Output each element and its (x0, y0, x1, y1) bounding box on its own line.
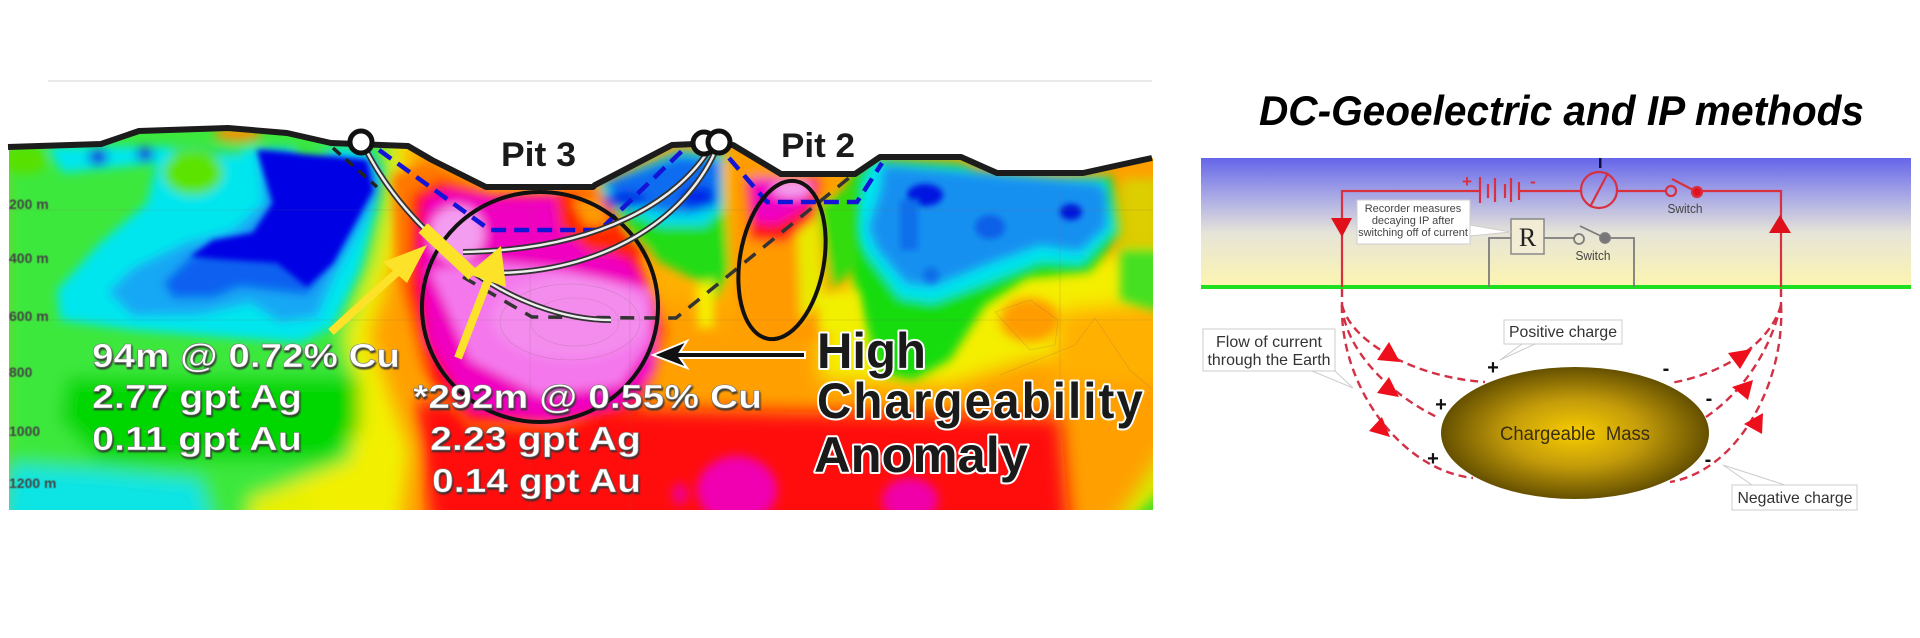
switch labels (1576, 201, 1702, 263)
chargeable mass: Chargeable Mass (1500, 424, 1650, 445)
contour and grid lines (9, 190, 1153, 510)
blue dashed pit outline right (729, 158, 882, 202)
charge symbols: + (1487, 357, 1499, 379)
battery polarity: - (1530, 172, 1536, 191)
title: DC-Geoelectric and IP methods (1259, 87, 1864, 134)
charge symbols: + (1427, 448, 1439, 470)
anomaly heading: Chargeability (817, 374, 1143, 429)
current symbol I (1599, 158, 1602, 168)
anomaly ellipse: Pit 2 (727, 174, 837, 346)
charge symbols: - (1663, 358, 1669, 380)
black dashed resource base (463, 173, 855, 318)
battery polarity (1462, 172, 1536, 191)
label: positive charge (1500, 320, 1622, 360)
depth axis labels: 1200 m (9, 475, 56, 491)
recorder callout: switching off of current (1358, 227, 1468, 239)
chargeability colour field (9, 131, 1153, 510)
switch labels: Switch (1576, 248, 1610, 263)
charge symbols: - (1705, 449, 1711, 471)
top divider (48, 80, 1152, 82)
chargeable mass (1441, 367, 1709, 499)
pit labels: Pit 2 (781, 127, 855, 165)
depth axis labels: 800 (9, 364, 33, 380)
black dashed resource outline (333, 148, 377, 187)
panel: DC-Geoelectric and IP methods (1201, 87, 1911, 510)
drill intercept text (92, 337, 762, 499)
depth axis labels (9, 196, 56, 491)
anomaly circle: Pit 3 (422, 192, 658, 422)
charge symbols: - (1706, 388, 1712, 410)
ground line (1201, 285, 1911, 289)
blue dashed pit outline (379, 150, 683, 230)
recorder callout: Recorder measures (1365, 203, 1462, 215)
sky gradient (1201, 158, 1911, 287)
panel: chargeability section map (8, 125, 1153, 510)
drill intercept text: 2.77 gpt Ag (92, 378, 302, 415)
drill intercept text: 0.11 gpt Au (92, 420, 302, 457)
depth axis labels: 1000 (9, 423, 40, 439)
label: flow of current: Flow of current (1216, 334, 1323, 351)
label: flow of current: through the Earth (1208, 352, 1330, 369)
recorder callout (1357, 200, 1511, 244)
switch labels: Switch (1668, 201, 1702, 216)
pit labels (501, 127, 855, 174)
depth axis labels: 200 m (9, 196, 49, 212)
recorder circuit (1489, 226, 1634, 287)
anomaly heading: High (817, 323, 926, 379)
black arrow to anomaly (653, 341, 805, 368)
recorder R (1511, 219, 1544, 254)
label: positive charge: Positive charge (1509, 324, 1617, 341)
current flow through the earth (1342, 289, 1781, 482)
drill intercept text: 94m @ 0.72% Cu (92, 337, 400, 374)
anomaly heading: Anomaly (814, 427, 1028, 483)
label: negative charge (1723, 465, 1857, 510)
flow arrowheads (1369, 342, 1763, 437)
depth axis labels: 400 m (9, 250, 49, 266)
yellow arrow 1 (331, 245, 427, 332)
charge symbols: + (1435, 394, 1447, 416)
battery polarity: + (1462, 172, 1472, 191)
depth axis labels: 600 m (9, 308, 49, 324)
terrain profile (8, 128, 1152, 187)
charge symbols (1427, 357, 1712, 471)
drill holes (362, 142, 718, 320)
current circuit (1331, 172, 1791, 287)
anomaly heading (814, 323, 1143, 483)
drill collars (350, 131, 730, 154)
label: flow of current (1203, 329, 1353, 388)
recorder callout: decaying IP after (1372, 215, 1455, 227)
recorder R: R (1519, 223, 1537, 252)
label: negative charge: Negative charge (1738, 490, 1853, 507)
drill intercept text: 0.14 gpt Au (432, 462, 641, 499)
drill intercept text: 2.23 gpt Ag (430, 420, 641, 457)
mineralized intercept segment (423, 228, 473, 275)
drill intercept text: *292m @ 0.55% Cu (413, 378, 762, 415)
yellow arrow 2 (458, 246, 506, 358)
white sky above terrain (0, 110, 1160, 187)
pit labels: Pit 3 (501, 136, 576, 174)
